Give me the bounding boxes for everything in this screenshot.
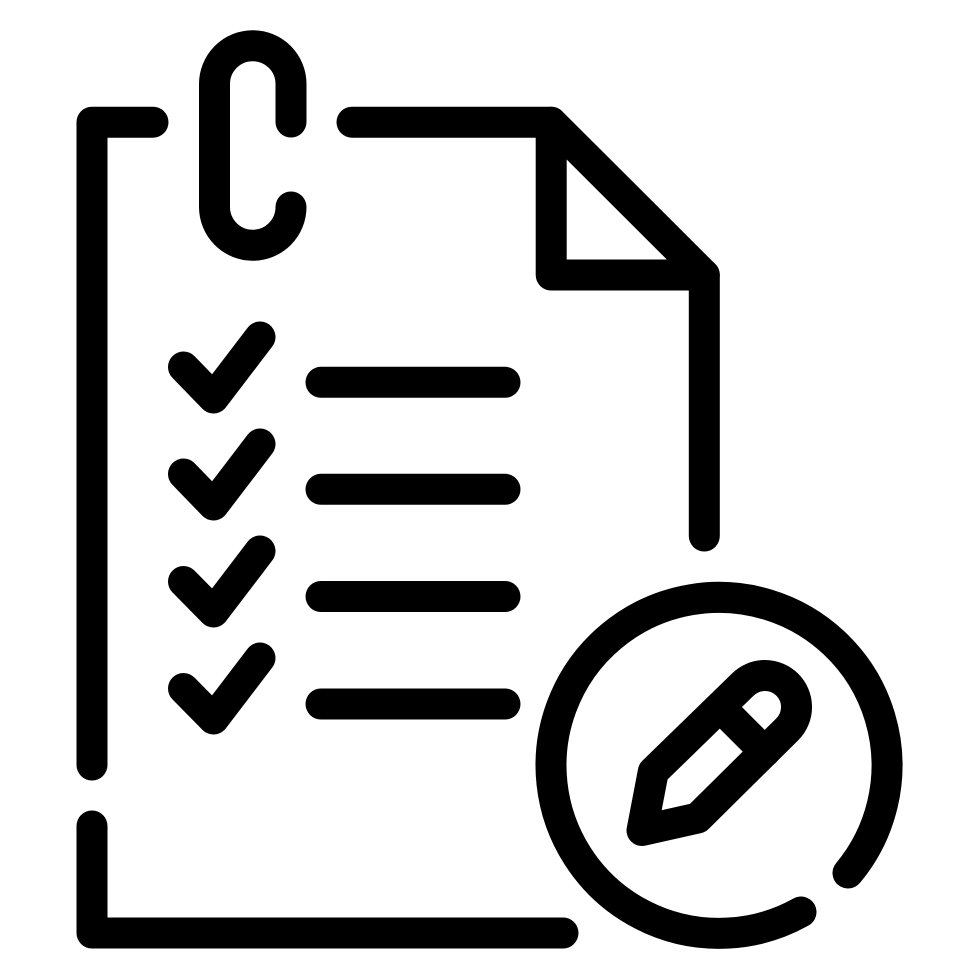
document outline bottom [92, 826, 563, 933]
paper clip [214, 46, 291, 245]
page fold [551, 122, 704, 275]
pencil [642, 675, 797, 830]
checklist row 1 [184, 337, 505, 398]
checklist row 2 [184, 444, 505, 505]
checklist row 4 [184, 658, 505, 719]
document outline upper left [92, 122, 153, 765]
checklist row 3 [184, 551, 505, 612]
circle around pencil [551, 597, 887, 933]
document top edge and right side [352, 122, 704, 536]
